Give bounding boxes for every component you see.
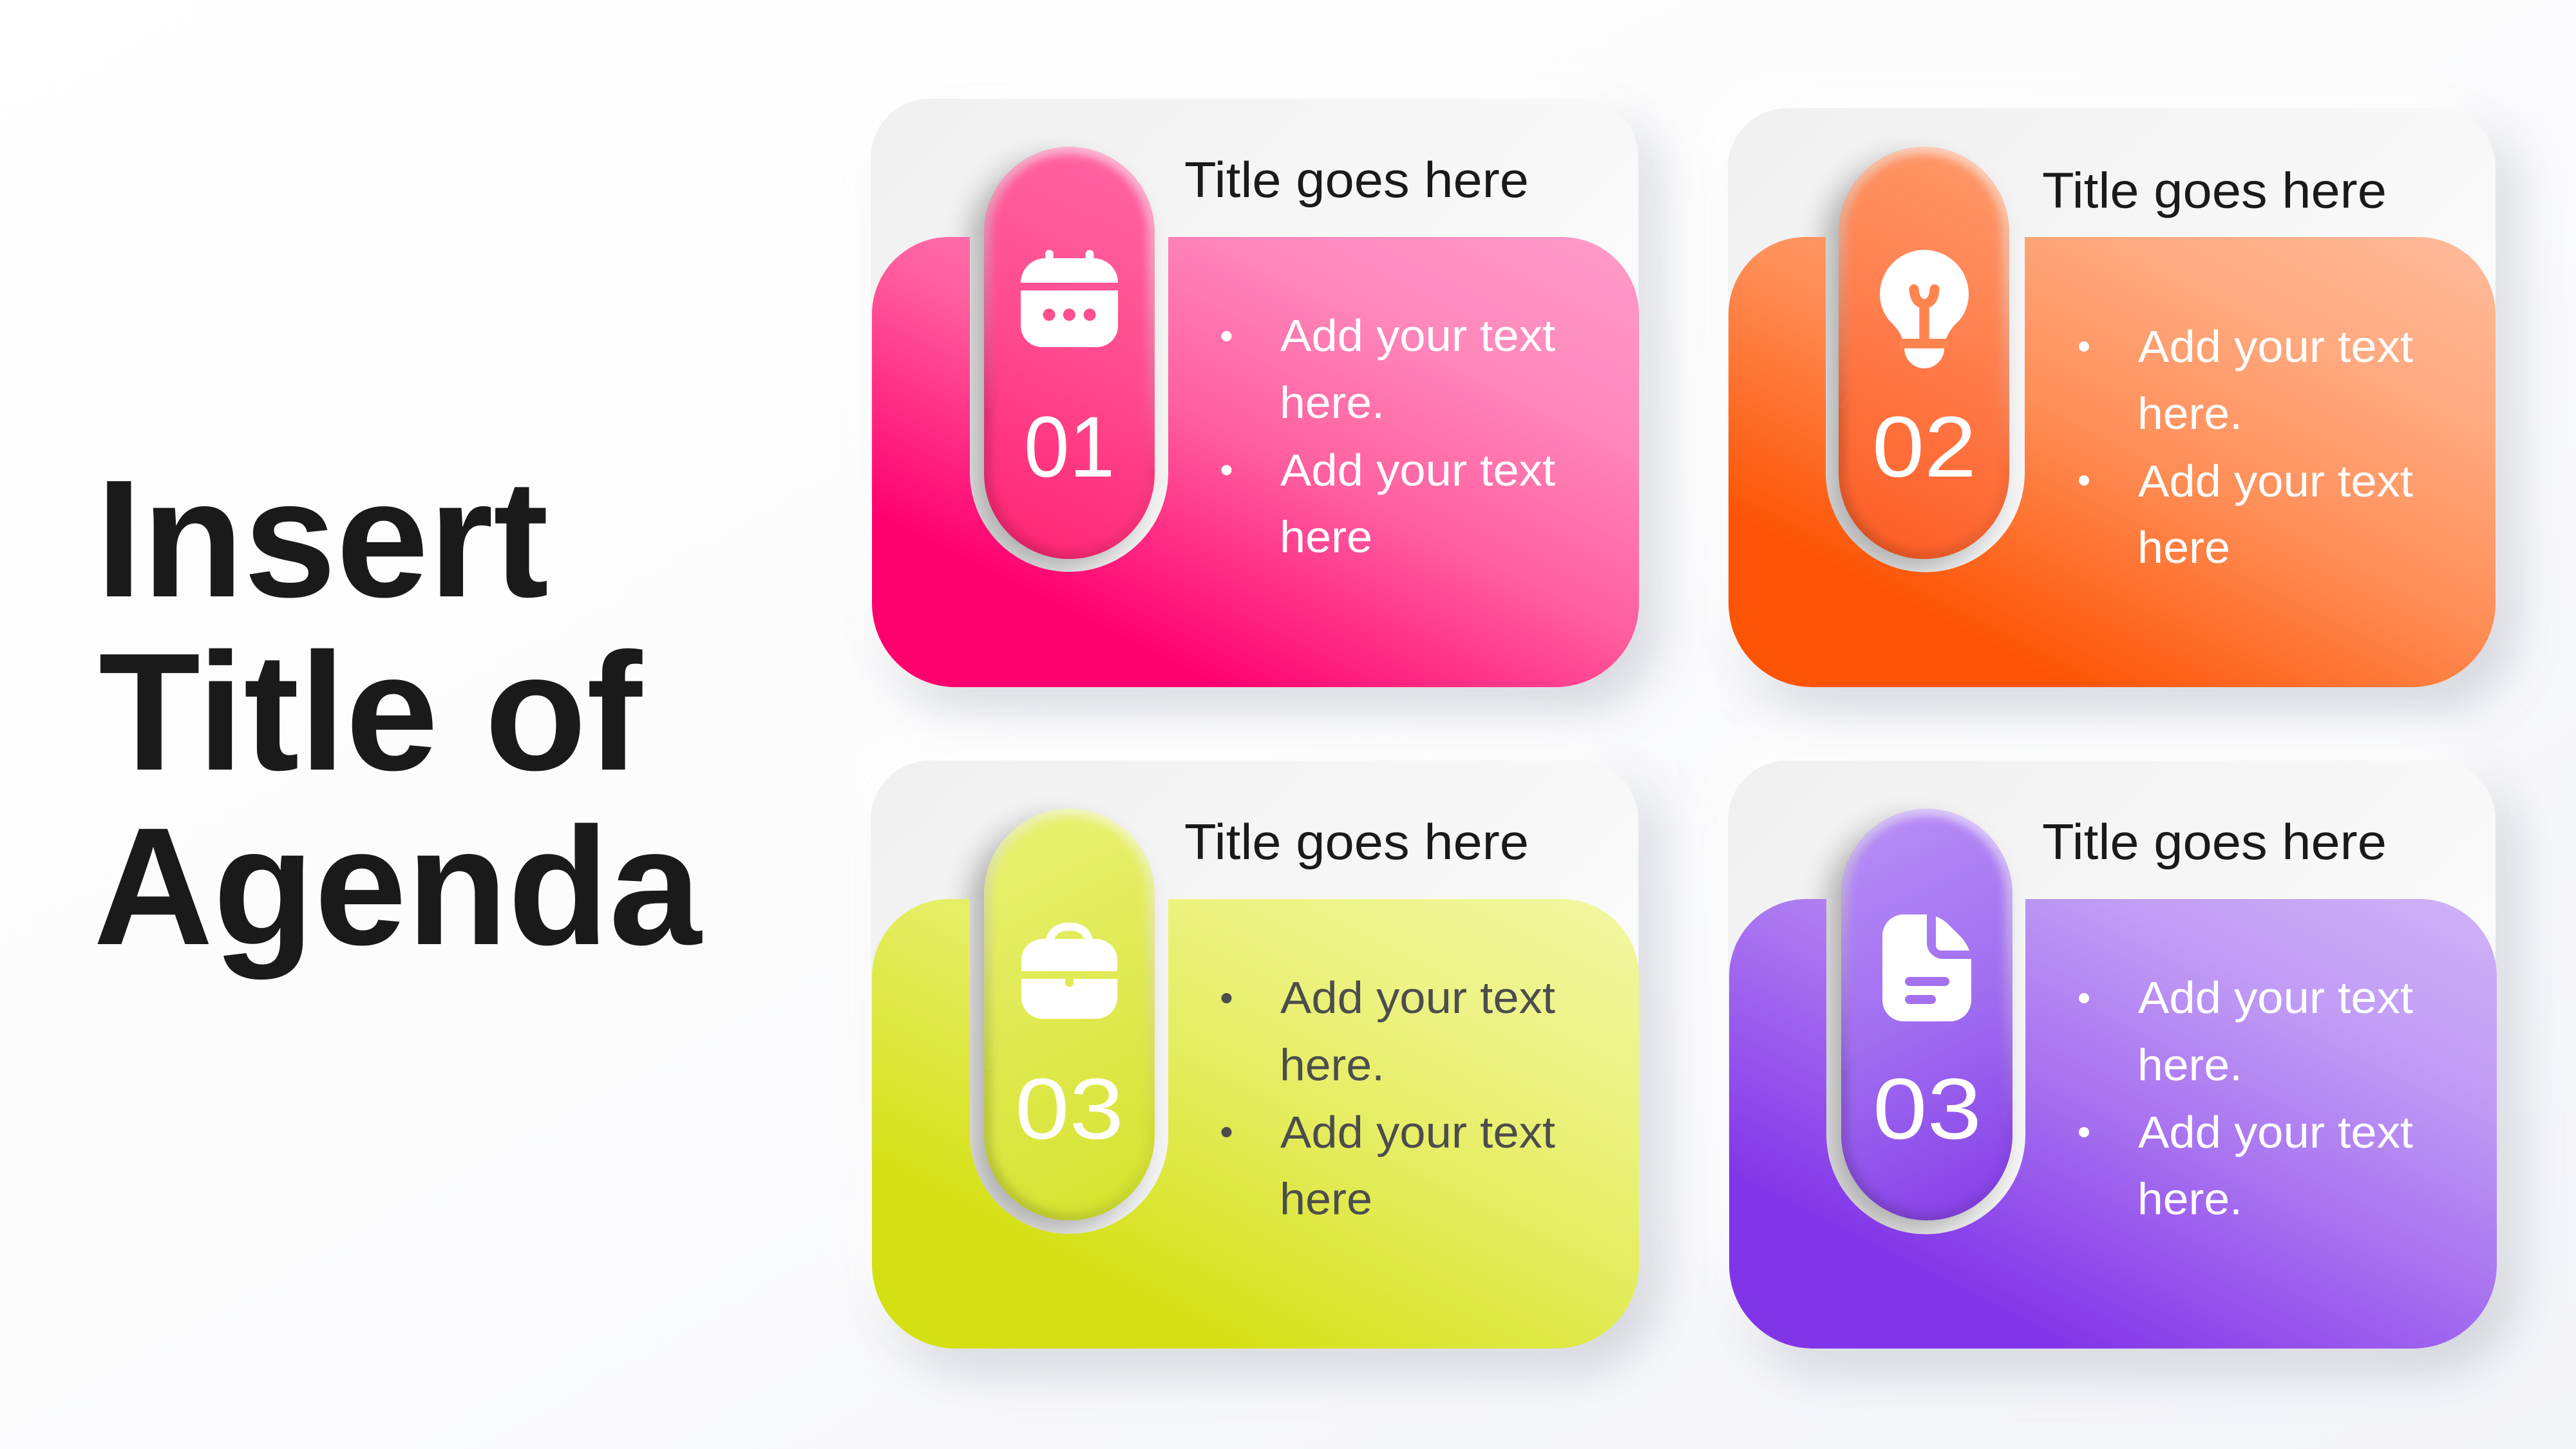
title: Title of xyxy=(99,619,644,806)
text block 02: here. xyxy=(2137,388,2242,439)
heading 01: Title goes here xyxy=(1184,151,1529,208)
number 01: 01 xyxy=(1024,399,1115,495)
icon: light bulb xyxy=(1880,250,1969,368)
panel: card 02 orange xyxy=(1728,108,2496,687)
pill 04 xyxy=(1841,809,2012,1220)
number 03: 03 xyxy=(1015,1061,1124,1157)
colour block 01 xyxy=(872,237,1639,687)
panel: card 03 lime xyxy=(871,761,1639,1349)
text block 04: Add your text xyxy=(2138,972,2413,1023)
pill 01 xyxy=(984,147,1155,559)
panel: card 04 purple xyxy=(1728,761,2497,1349)
text block 04: here. xyxy=(2137,1039,2242,1090)
icon: calendar xyxy=(1021,250,1118,347)
number 02: 02 xyxy=(1872,399,1976,495)
text block 03 xyxy=(1221,972,1555,1224)
colour block 03 xyxy=(872,899,1639,1349)
heading 02: Title goes here xyxy=(2042,162,2387,219)
number 04: 03 xyxy=(1873,1061,1982,1157)
colour block 02 xyxy=(1728,237,2496,687)
text block 04: Add your text xyxy=(2138,1107,2413,1157)
text block 03: here. xyxy=(1280,1039,1385,1090)
heading 04: Title goes here xyxy=(2042,813,2387,870)
pill 02 xyxy=(1839,147,2009,559)
panel: card 01 pink xyxy=(871,99,1639,687)
title: Insert xyxy=(96,446,549,632)
text block 03: Add your text xyxy=(1280,972,1555,1023)
icon: document xyxy=(1882,914,1971,1021)
text block 01: Add your text xyxy=(1280,445,1555,495)
text block 01 xyxy=(1221,310,1555,562)
text block 02: Add your text xyxy=(2138,456,2413,506)
text block 01: here. xyxy=(1280,377,1385,428)
text block 04 xyxy=(2079,972,2413,1224)
heading 03: Title goes here xyxy=(1184,813,1529,870)
pill 03 xyxy=(984,809,1155,1220)
text block 01: here xyxy=(1280,511,1372,562)
title xyxy=(93,446,703,981)
text block 03: Add your text xyxy=(1280,1107,1555,1157)
text block 01: Add your text xyxy=(1280,310,1555,361)
text block 02: Add your text xyxy=(2138,321,2413,372)
text block 02: here xyxy=(2137,522,2230,573)
colour block 04 xyxy=(1729,899,2497,1349)
text block 03: here xyxy=(1280,1173,1372,1224)
icon: briefcase xyxy=(1021,927,1117,1019)
text block 04: here. xyxy=(2137,1173,2242,1224)
title: Agenda xyxy=(93,793,703,981)
text block 02 xyxy=(2079,321,2413,573)
